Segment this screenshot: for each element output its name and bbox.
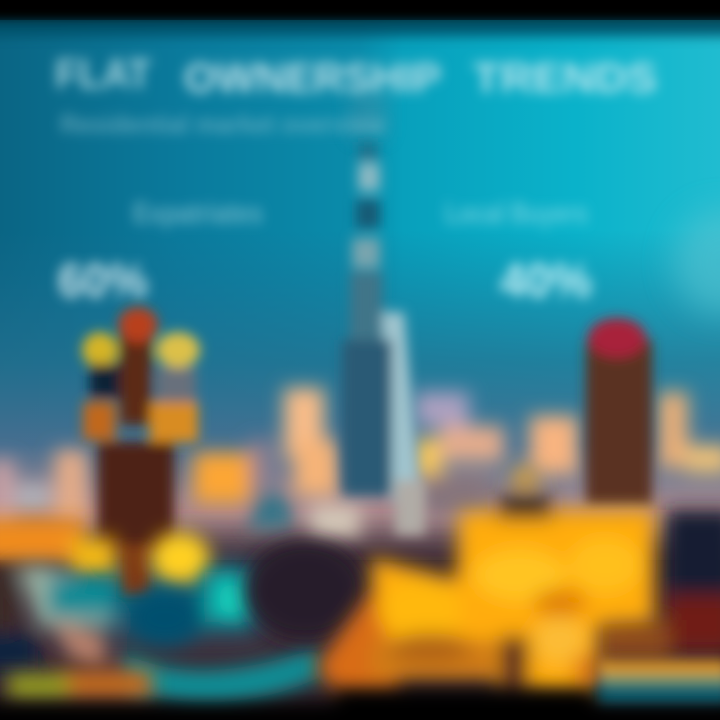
left brown tower: [82, 307, 200, 595]
distant skyline buildings: [0, 388, 720, 537]
bottom black border: [0, 690, 720, 720]
teal curved waterway: [0, 566, 322, 702]
right brown tower: [586, 318, 652, 505]
left statistic: 60%: [58, 255, 148, 308]
dark building right: [600, 510, 720, 660]
panel: sky background: [0, 16, 720, 560]
lower right waterfront: [595, 660, 720, 706]
central tall tower: [342, 142, 425, 535]
right column label: Local Buyers: [445, 197, 588, 230]
lower left shore: [8, 670, 152, 698]
golden illuminated buildings: [316, 467, 654, 696]
panel: city ground base: [0, 535, 720, 705]
subtitle: Residential market overview: [60, 109, 386, 139]
title: [55, 50, 657, 101]
lights at left tower base: [0, 518, 210, 584]
title: FLAT: [55, 50, 151, 97]
central dark mass: [245, 540, 365, 640]
title: OWNERSHIP: [184, 54, 441, 101]
right statistic: 40%: [500, 255, 592, 308]
title: TRENDS: [473, 54, 657, 101]
top black border: [0, 0, 720, 18]
left column label: Expatriates: [133, 197, 263, 230]
